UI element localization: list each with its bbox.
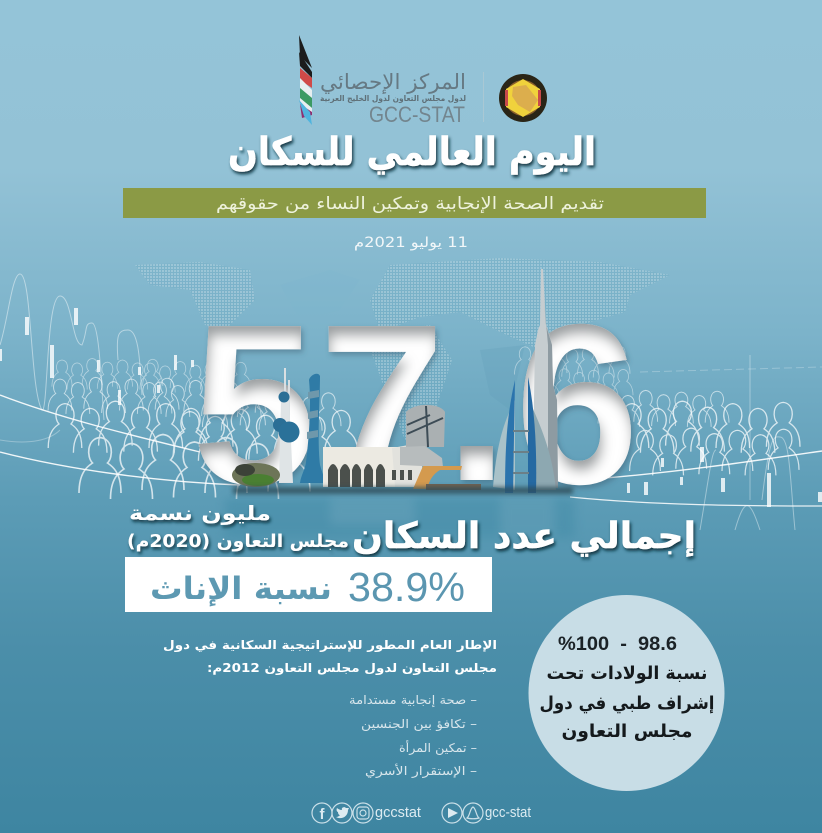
landmark: park greenery bbox=[232, 463, 280, 487]
female share box: نسبة الإناث bbox=[150, 571, 332, 607]
logo: GCC-STAT bbox=[299, 35, 466, 127]
logo ribbons bbox=[299, 35, 312, 125]
handle: gccstat: gccstat bbox=[375, 805, 421, 821]
handle: gcc-stat: gcc-stat bbox=[485, 805, 531, 821]
icon: youtube bbox=[442, 803, 462, 823]
skyline of Gulf landmarks bbox=[232, 269, 573, 494]
social media row bbox=[312, 803, 531, 823]
big number 57.6: 6 bbox=[515, 278, 639, 532]
logo arabic subtitle: لدول مجلس التعاون لدول الخليج العربية bbox=[320, 94, 466, 104]
big number 57.6 bbox=[192, 275, 639, 532]
skyline base bbox=[233, 487, 573, 494]
world map bbox=[135, 258, 670, 440]
million people label: مليون نسمة bbox=[129, 501, 271, 525]
trend lines bbox=[0, 274, 822, 530]
subtitle band bbox=[123, 188, 706, 218]
strategy list: – الإستقرار الأسري bbox=[365, 763, 477, 779]
logo divider bbox=[483, 72, 484, 122]
landmark: white arched building bbox=[323, 443, 424, 487]
subtitle band: تقديم الصحة الإنجابية وتمكين النساء من حقوقهم bbox=[216, 194, 604, 214]
icon: instagram bbox=[353, 803, 373, 823]
strategy framework text: الإطار العام المطور للإستراتيجية السكانية في دول bbox=[163, 638, 497, 653]
landmark: Kuwait Towers bbox=[273, 368, 300, 483]
circle callout: births under medical supervision: مجلس التعاون bbox=[562, 721, 692, 742]
landmark: Aspire torch bbox=[300, 374, 325, 483]
crowd illustration bbox=[48, 345, 800, 499]
logo latin name: GCC-STAT bbox=[369, 102, 465, 127]
icon: GCC emblem bbox=[499, 74, 547, 122]
landmark: Bahrain World Trade Center bbox=[493, 377, 556, 493]
landmark: orange pavilion bbox=[413, 466, 481, 490]
strategy list: – صحة إنجابية مستدامة bbox=[349, 693, 477, 707]
landmark: Burj Khalifa bbox=[533, 269, 558, 488]
GCC 2020 label: مجلس التعاون (2020م) bbox=[127, 531, 349, 552]
strategy list: – تكافؤ بين الجنسين bbox=[361, 717, 477, 732]
landmark: KAFD tower bbox=[400, 405, 445, 467]
date: 11 يوليو 2021م bbox=[354, 235, 468, 251]
strategy list bbox=[349, 693, 477, 779]
strategy list: – تمكين المرأة bbox=[399, 740, 477, 756]
strategy framework text bbox=[163, 638, 497, 676]
circle callout: births under medical supervision bbox=[528, 595, 724, 791]
big number 57.6: 7 bbox=[319, 278, 445, 532]
icon: twitter bbox=[332, 803, 352, 823]
icon: snapchat bbox=[463, 803, 483, 823]
total population heading: إجمالي عدد السكان bbox=[352, 516, 696, 557]
strategy framework text: مجلس التعاون لدول مجلس التعاون 2012م: bbox=[207, 661, 497, 676]
female share box bbox=[125, 557, 492, 612]
big number 57.6: 5 bbox=[192, 278, 316, 532]
circle callout: births under medical supervision: إشراف طبي في دول bbox=[540, 693, 714, 714]
title: اليوم العالمي للسكان bbox=[228, 130, 596, 175]
circle callout: births under medical supervision: %100 - 98.6 bbox=[558, 634, 677, 655]
circle callout: births under medical supervision: نسبة الولادات تحت bbox=[546, 663, 708, 684]
water reflection bbox=[225, 497, 575, 538]
logo arabic name: المركز الإحصائي bbox=[320, 70, 466, 94]
big number 57.6: . bbox=[445, 275, 508, 529]
icon: facebook bbox=[312, 803, 332, 823]
female share box: 38.9% bbox=[348, 564, 465, 610]
candlestick marks bbox=[0, 308, 822, 507]
icon: facebook: f bbox=[320, 806, 326, 823]
